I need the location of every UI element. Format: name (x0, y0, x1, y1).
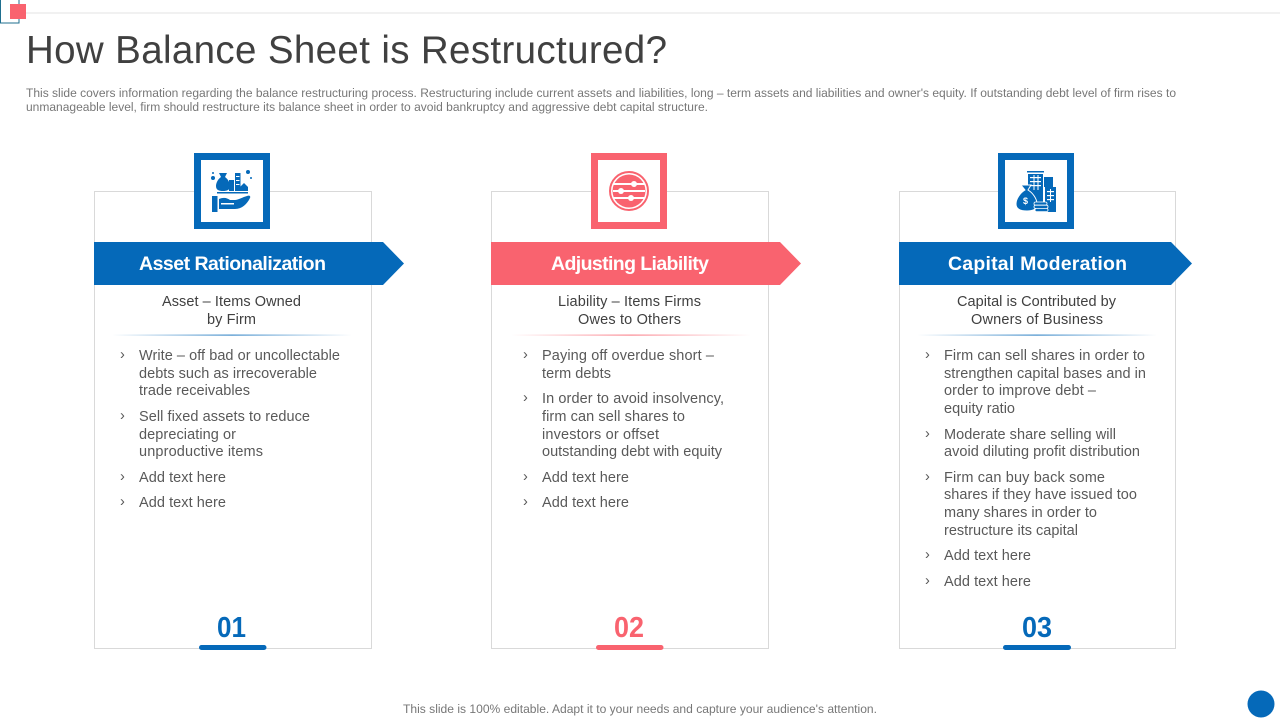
number 02 (596, 612, 664, 650)
icon: money bag and office towers: $ (1023, 196, 1028, 206)
bullet list: Firm can buy back some (944, 470, 1105, 486)
number 01 (199, 612, 266, 650)
subtitle (162, 294, 301, 328)
bullet list: unproductive items (139, 444, 263, 460)
number 02: 02 (614, 612, 644, 644)
subtitle: Liability – Items Firms (558, 294, 701, 310)
bullet list (523, 347, 724, 511)
bullet list: Paying off overdue short – (542, 348, 715, 364)
card frame (94, 192, 372, 648)
description (26, 86, 1176, 114)
bullet list: many shares in order to (944, 505, 1097, 521)
icon: money bag and office towers (1002, 156, 1070, 226)
bullet list: › (925, 573, 930, 589)
bullet list: Add text here (542, 495, 629, 511)
bullet list: › (120, 408, 125, 424)
bullet list: equity ratio (944, 401, 1015, 417)
bullet list: Moderate share selling will (944, 427, 1116, 443)
bullet list: › (925, 426, 930, 442)
bullet list: investors or offset (542, 427, 659, 443)
subtitle: Capital is Contributed by (957, 294, 1117, 310)
bullet list: Add text here (944, 574, 1031, 590)
bullet list: debts such as irrecoverable (139, 366, 317, 382)
title: How Balance Sheet is Restructured? (26, 29, 667, 72)
bullet list: › (925, 469, 930, 485)
bullet list: Add text here (139, 495, 226, 511)
header arrow: Asset Rationalization (139, 253, 326, 275)
bullet list (925, 347, 1146, 590)
bullet list: trade receivables (139, 383, 250, 399)
icon: money bag and buildings on a hand (198, 156, 266, 226)
bullet list: › (120, 469, 125, 485)
panel: asset rationalization (94, 156, 404, 650)
bullet list: › (120, 347, 125, 363)
bullet list: Add text here (944, 548, 1031, 564)
card frame (492, 192, 768, 648)
bullet list: restructure its capital (944, 523, 1078, 539)
subtitle (957, 294, 1117, 328)
header arrow (491, 242, 801, 285)
description: unmanageable level, firm should restructure its balance sheet in order to avoid bankruptcy and aggressive debt capital structure. (26, 100, 708, 114)
header arrow: Adjusting Liability (551, 253, 709, 275)
bullet list: term debts (542, 366, 611, 382)
bullet list: depreciating or (139, 427, 236, 443)
bullet list: › (925, 547, 930, 563)
bullet list: avoid diluting profit distribution (944, 444, 1140, 460)
number 01: 01 (217, 612, 246, 644)
bullet list: outstanding debt with equity (542, 444, 723, 460)
bullet list: › (120, 494, 125, 510)
bullet list: Add text here (139, 470, 226, 486)
panel: adjusting liability (491, 156, 801, 650)
bullet list: shares if they have issued too (944, 487, 1137, 503)
bullet list: Write – off bad or uncollectable (139, 348, 340, 364)
header arrow (899, 242, 1192, 285)
subtitle: Asset – Items Owned (162, 294, 301, 310)
bullet list: strengthen capital bases and in (944, 366, 1146, 382)
bullet list: › (523, 469, 528, 485)
bullet list: order to improve debt – (944, 383, 1097, 399)
footer note: This slide is 100% editable. Adapt it to your needs and capture your audience's attention. (403, 702, 877, 716)
bullet list: › (523, 390, 528, 406)
subtitle: Owners of Business (971, 312, 1103, 328)
bullet list: › (925, 347, 930, 363)
bullet list (120, 347, 340, 511)
card frame (900, 192, 1176, 648)
corner accent (0, 0, 1280, 23)
description: This slide covers information regarding the balance restructuring process. Restructuring include current assets and liabilities, long – term assets and liabilities and owner's equity. If outstanding debt level of firm rises to (26, 86, 1176, 100)
bullet list: firm can sell shares to (542, 409, 685, 425)
header arrow (94, 242, 404, 285)
bullet list: Firm can sell shares in order to (944, 348, 1145, 364)
page marker circle (1248, 690, 1274, 718)
header arrow: Capital Moderation (948, 253, 1127, 275)
panel: capital moderation (899, 156, 1192, 650)
bullet list: › (523, 347, 528, 363)
bullet list: Sell fixed assets to reduce (139, 409, 310, 425)
subtitle (558, 294, 701, 328)
icon: circle with sliders (594, 156, 664, 226)
number 03 (1003, 612, 1071, 650)
number 03: 03 (1022, 612, 1052, 644)
bullet list: In order to avoid insolvency, (542, 391, 724, 407)
bullet list: Add text here (542, 470, 629, 486)
subtitle: Owes to Others (578, 312, 681, 328)
subtitle: by Firm (207, 312, 256, 328)
bullet list: › (523, 494, 528, 510)
